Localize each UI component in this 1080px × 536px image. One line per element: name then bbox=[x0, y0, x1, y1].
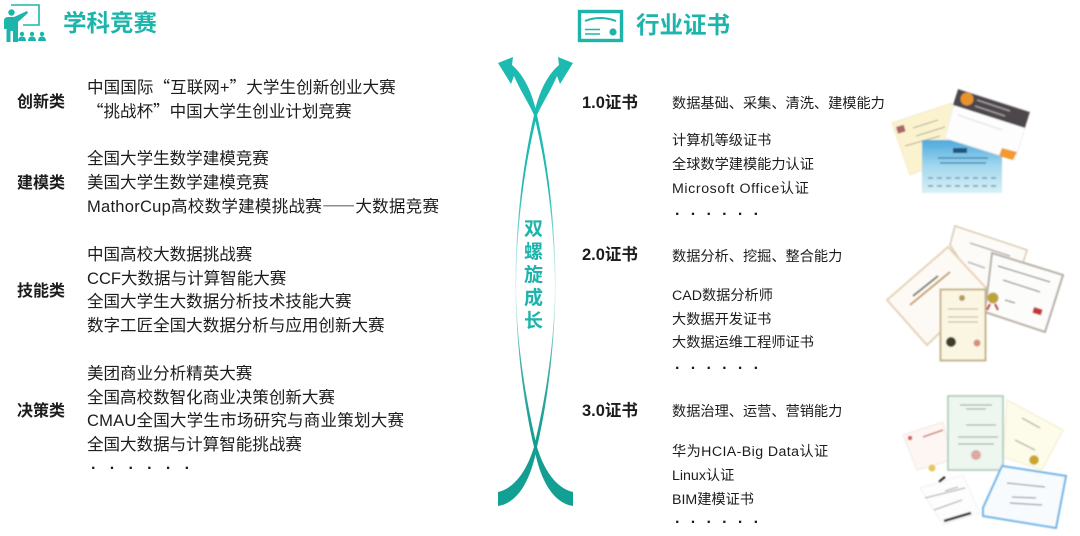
group: 1.0证书: 数据基础、采集、清洗、建模能力 bbox=[672, 96, 885, 112]
group: 3.0证书: 华为HCIA-Big Data认证 bbox=[672, 444, 829, 460]
group: 决策类 bbox=[17, 364, 404, 477]
group: 创新类 bbox=[17, 74, 396, 122]
group: 2.0证书: ······ bbox=[675, 360, 769, 377]
group: 技能类: 数字工匠全国大数据分析与应用创新大赛 bbox=[87, 316, 385, 335]
group: 建模类: 全国大学生数学建模竞赛 bbox=[87, 149, 269, 168]
panel: 行业证书 list bbox=[582, 94, 885, 531]
group: 决策类: 决策类 bbox=[17, 403, 65, 420]
vertical label: 双螺旋成长 bbox=[524, 219, 543, 332]
group: 1.0证书: 1.0证书 bbox=[582, 94, 638, 112]
group: 技能类: 全国大学生大数据分析技术技能大赛 bbox=[87, 292, 352, 311]
group: 2.0证书: 2.0证书 bbox=[582, 246, 638, 264]
group: 1.0证书: 全球数学建模能力认证 bbox=[672, 157, 814, 173]
icon: certificate card bbox=[578, 10, 624, 42]
group: 创新类: “挑战杯”中国大学生创业计划竞赛 bbox=[87, 98, 352, 122]
group: 2.0证书: CAD数据分析师 bbox=[672, 288, 773, 304]
group: 2.0证书 bbox=[582, 246, 842, 377]
panel: 学科竞赛 list bbox=[17, 74, 439, 477]
group: 技能类: 技能类 bbox=[17, 283, 65, 300]
group: 技能类: CCF大数据与计算智能大赛 bbox=[87, 269, 286, 288]
group: 3.0证书: 数据治理、运营、营销能力 bbox=[672, 404, 842, 420]
vertical label: 双螺旋成长: 成 bbox=[524, 288, 543, 309]
heading: 行业证书: 行业证书 bbox=[636, 12, 730, 38]
group: 决策类: 美团商业分析精英大赛 bbox=[87, 364, 252, 383]
group: 建模类: 建模类 bbox=[17, 175, 65, 192]
group: 1.0证书: Microsoft Office认证 bbox=[672, 181, 809, 197]
group: 3.0证书 bbox=[582, 402, 842, 531]
group: 1.0证书: 计算机等级证书 bbox=[672, 133, 771, 149]
heading: 学科竞赛: 学科竞赛 bbox=[63, 10, 157, 36]
vertical label: 双螺旋成长: 长 bbox=[524, 311, 543, 332]
left-top to left-bottom strand bbox=[498, 57, 556, 506]
group: 决策类: 全国高校数智化商业决策创新大赛 bbox=[87, 388, 335, 407]
group: 建模类: MathorCup高校数学建模挑战赛——大数据竞赛 bbox=[87, 193, 439, 217]
group: 1.0证书: ······ bbox=[675, 206, 769, 223]
group: 创新类: 创新类 bbox=[17, 94, 65, 111]
group: 2.0证书: 大数据开发证书 bbox=[672, 312, 771, 328]
group: 2.0证书: 大数据运维工程师证书 bbox=[672, 335, 814, 351]
group: 1.0证书 bbox=[582, 94, 885, 223]
group: 3.0证书: Linux认证 bbox=[672, 468, 734, 484]
group: 3.0证书: ······ bbox=[675, 514, 769, 531]
group: 2.0证书: 数据分析、挖掘、整合能力 bbox=[672, 249, 842, 265]
vertical label: 双螺旋成长: 双 bbox=[524, 219, 543, 240]
vertical label: 双螺旋成长: 旋 bbox=[524, 265, 543, 286]
group: 决策类: 全国大数据与计算智能挑战赛 bbox=[87, 435, 302, 454]
right-top to right-bottom strand bbox=[515, 57, 573, 506]
group: 技能类: 中国高校大数据挑战赛 bbox=[87, 245, 252, 264]
group: 决策类: ······ bbox=[91, 460, 203, 477]
group: 建模类: 美国大学生数学建模竞赛 bbox=[87, 173, 269, 192]
icon: teacher with audience bbox=[4, 4, 46, 42]
group: 3.0证书: 3.0证书 bbox=[582, 402, 638, 420]
group: 创新类: 中国国际“互联网+”大学生创新创业大赛 bbox=[87, 74, 396, 98]
vertical label: 双螺旋成长: 螺 bbox=[524, 242, 543, 263]
group: 决策类: CMAU全国大学生市场研究与商业策划大赛 bbox=[87, 411, 404, 430]
group: 3.0证书: BIM建模证书 bbox=[672, 492, 754, 508]
group: 技能类 bbox=[17, 245, 385, 335]
group: 建模类 bbox=[17, 149, 439, 217]
